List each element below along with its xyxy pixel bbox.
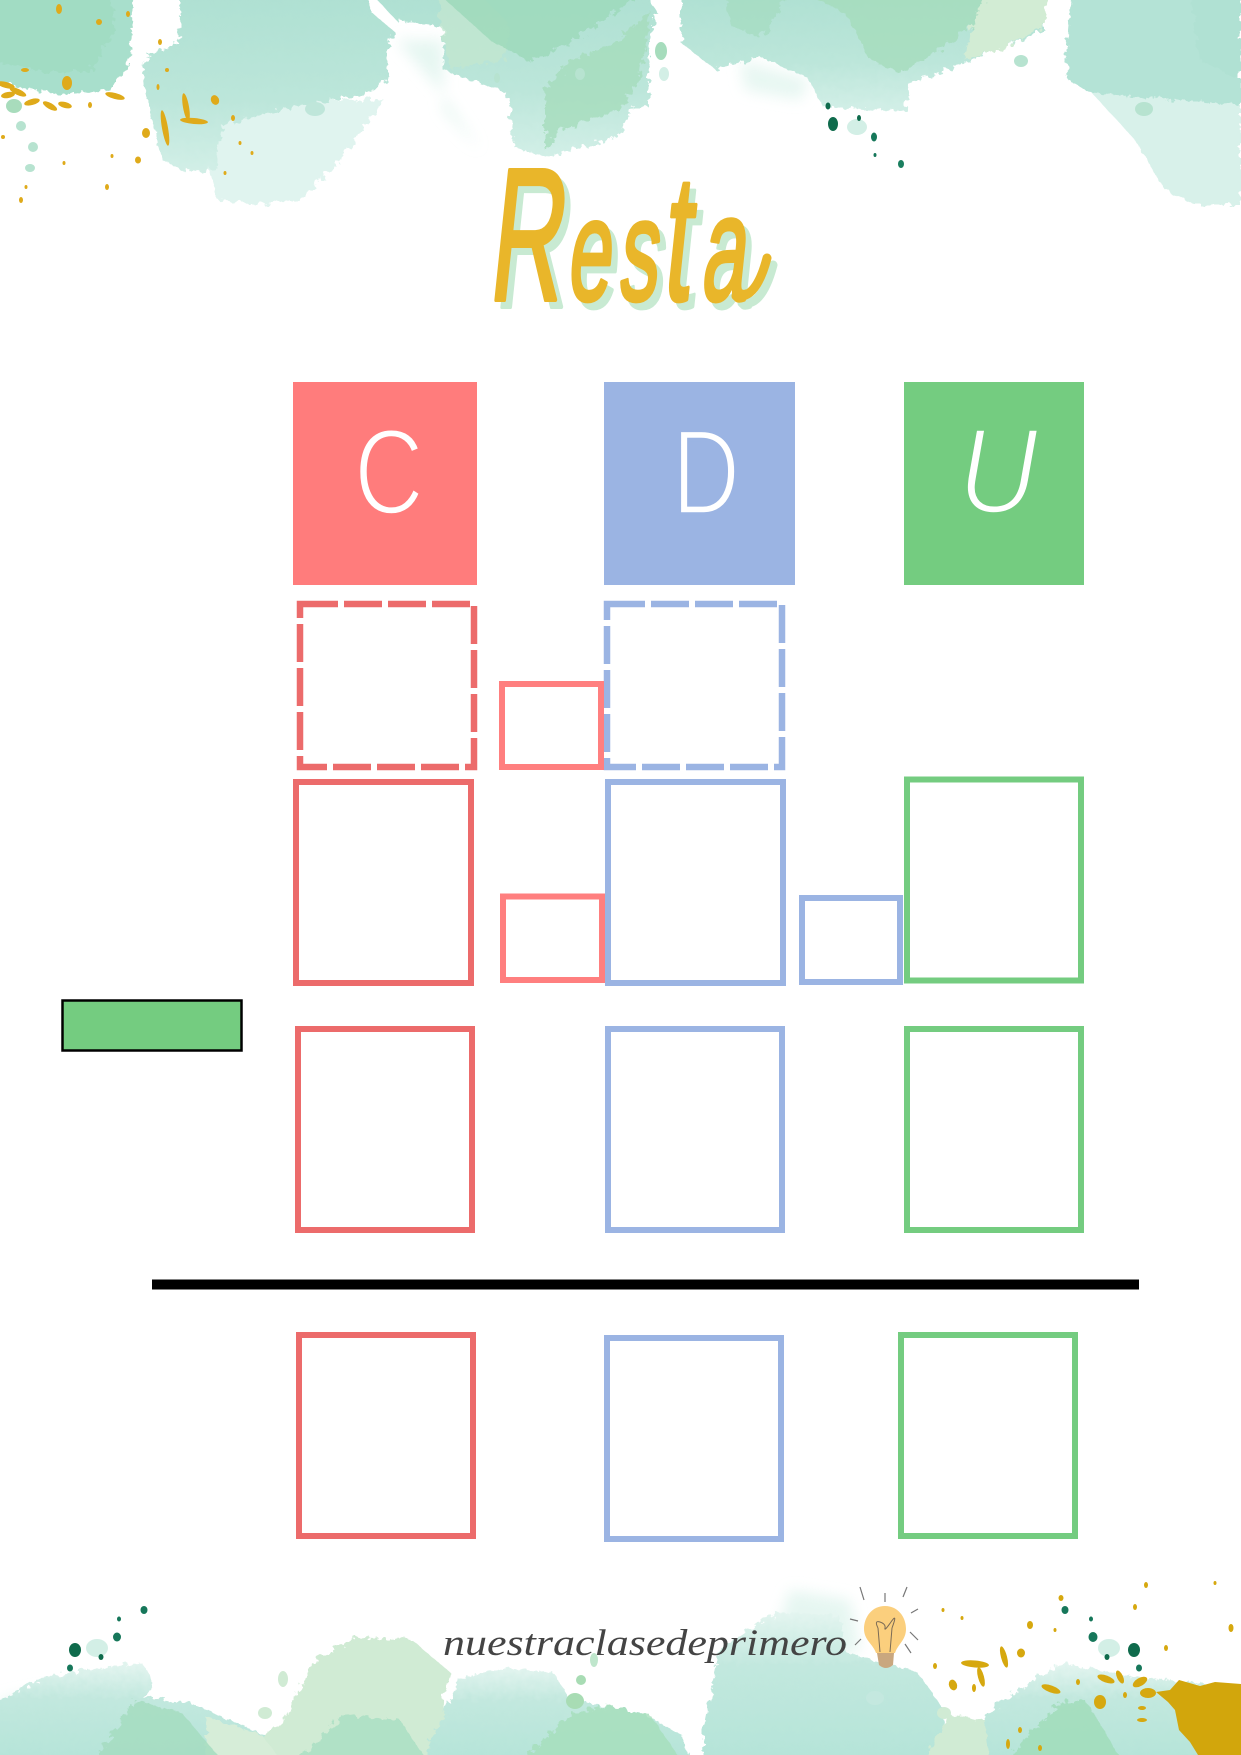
row 2: units box [907, 1029, 1081, 1230]
row 1: hundreds box [296, 782, 471, 983]
title text: e [563, 169, 623, 331]
title shadow: s [620, 176, 676, 338]
small carry box: blue [802, 898, 900, 982]
title text: a [696, 164, 760, 332]
title shadow: a [702, 171, 766, 339]
footer brand text: nuestraclasedeprimero [443, 1623, 847, 1664]
gold splatter: bottom right [933, 1581, 1234, 1751]
dark green splatter: top [826, 102, 904, 168]
row 2: hundreds box [298, 1029, 472, 1230]
title text: t [657, 136, 705, 338]
dark green splatter: bottom right [1062, 1606, 1142, 1672]
small carry box: red, lower [503, 896, 602, 980]
result: units box [901, 1335, 1075, 1536]
column header: U [904, 382, 1084, 585]
column header: U: U [958, 403, 1039, 539]
title shadow: e [569, 176, 629, 338]
column header: C [293, 382, 477, 585]
title text: s [614, 169, 670, 331]
column header: D: D [672, 404, 740, 540]
watercolor wash: top [0, 0, 1241, 205]
pale green droplets [86, 1639, 1120, 1719]
row 2: tens box [608, 1029, 782, 1230]
result line [152, 1280, 1139, 1290]
title text: R [483, 130, 579, 341]
row 1: units box [907, 780, 1081, 980]
title text [483, 130, 767, 341]
gold paint splash: bottom right [1156, 1680, 1241, 1755]
gold splatter: top left [0, 4, 253, 203]
icon: light bulb [850, 1587, 918, 1668]
result: tens box [607, 1338, 781, 1539]
dark green splatter: bottom left [67, 1606, 148, 1672]
column header: C: C [354, 404, 424, 540]
column header: D [604, 382, 795, 585]
row 1: tens box [608, 782, 783, 983]
pale green droplets [6, 42, 1153, 172]
watercolor wash: bottom [0, 1581, 1241, 1755]
result: hundreds box [299, 1335, 473, 1536]
minus sign [62, 1000, 242, 1050]
title shadow: R [489, 137, 585, 348]
dashed box: borrowed tens [607, 604, 782, 767]
small carry box: red, upper [502, 684, 601, 767]
title shadow [489, 137, 773, 348]
title shadow: t [663, 143, 711, 345]
dashed box: borrowed hundreds [300, 604, 474, 767]
title [483, 130, 773, 348]
